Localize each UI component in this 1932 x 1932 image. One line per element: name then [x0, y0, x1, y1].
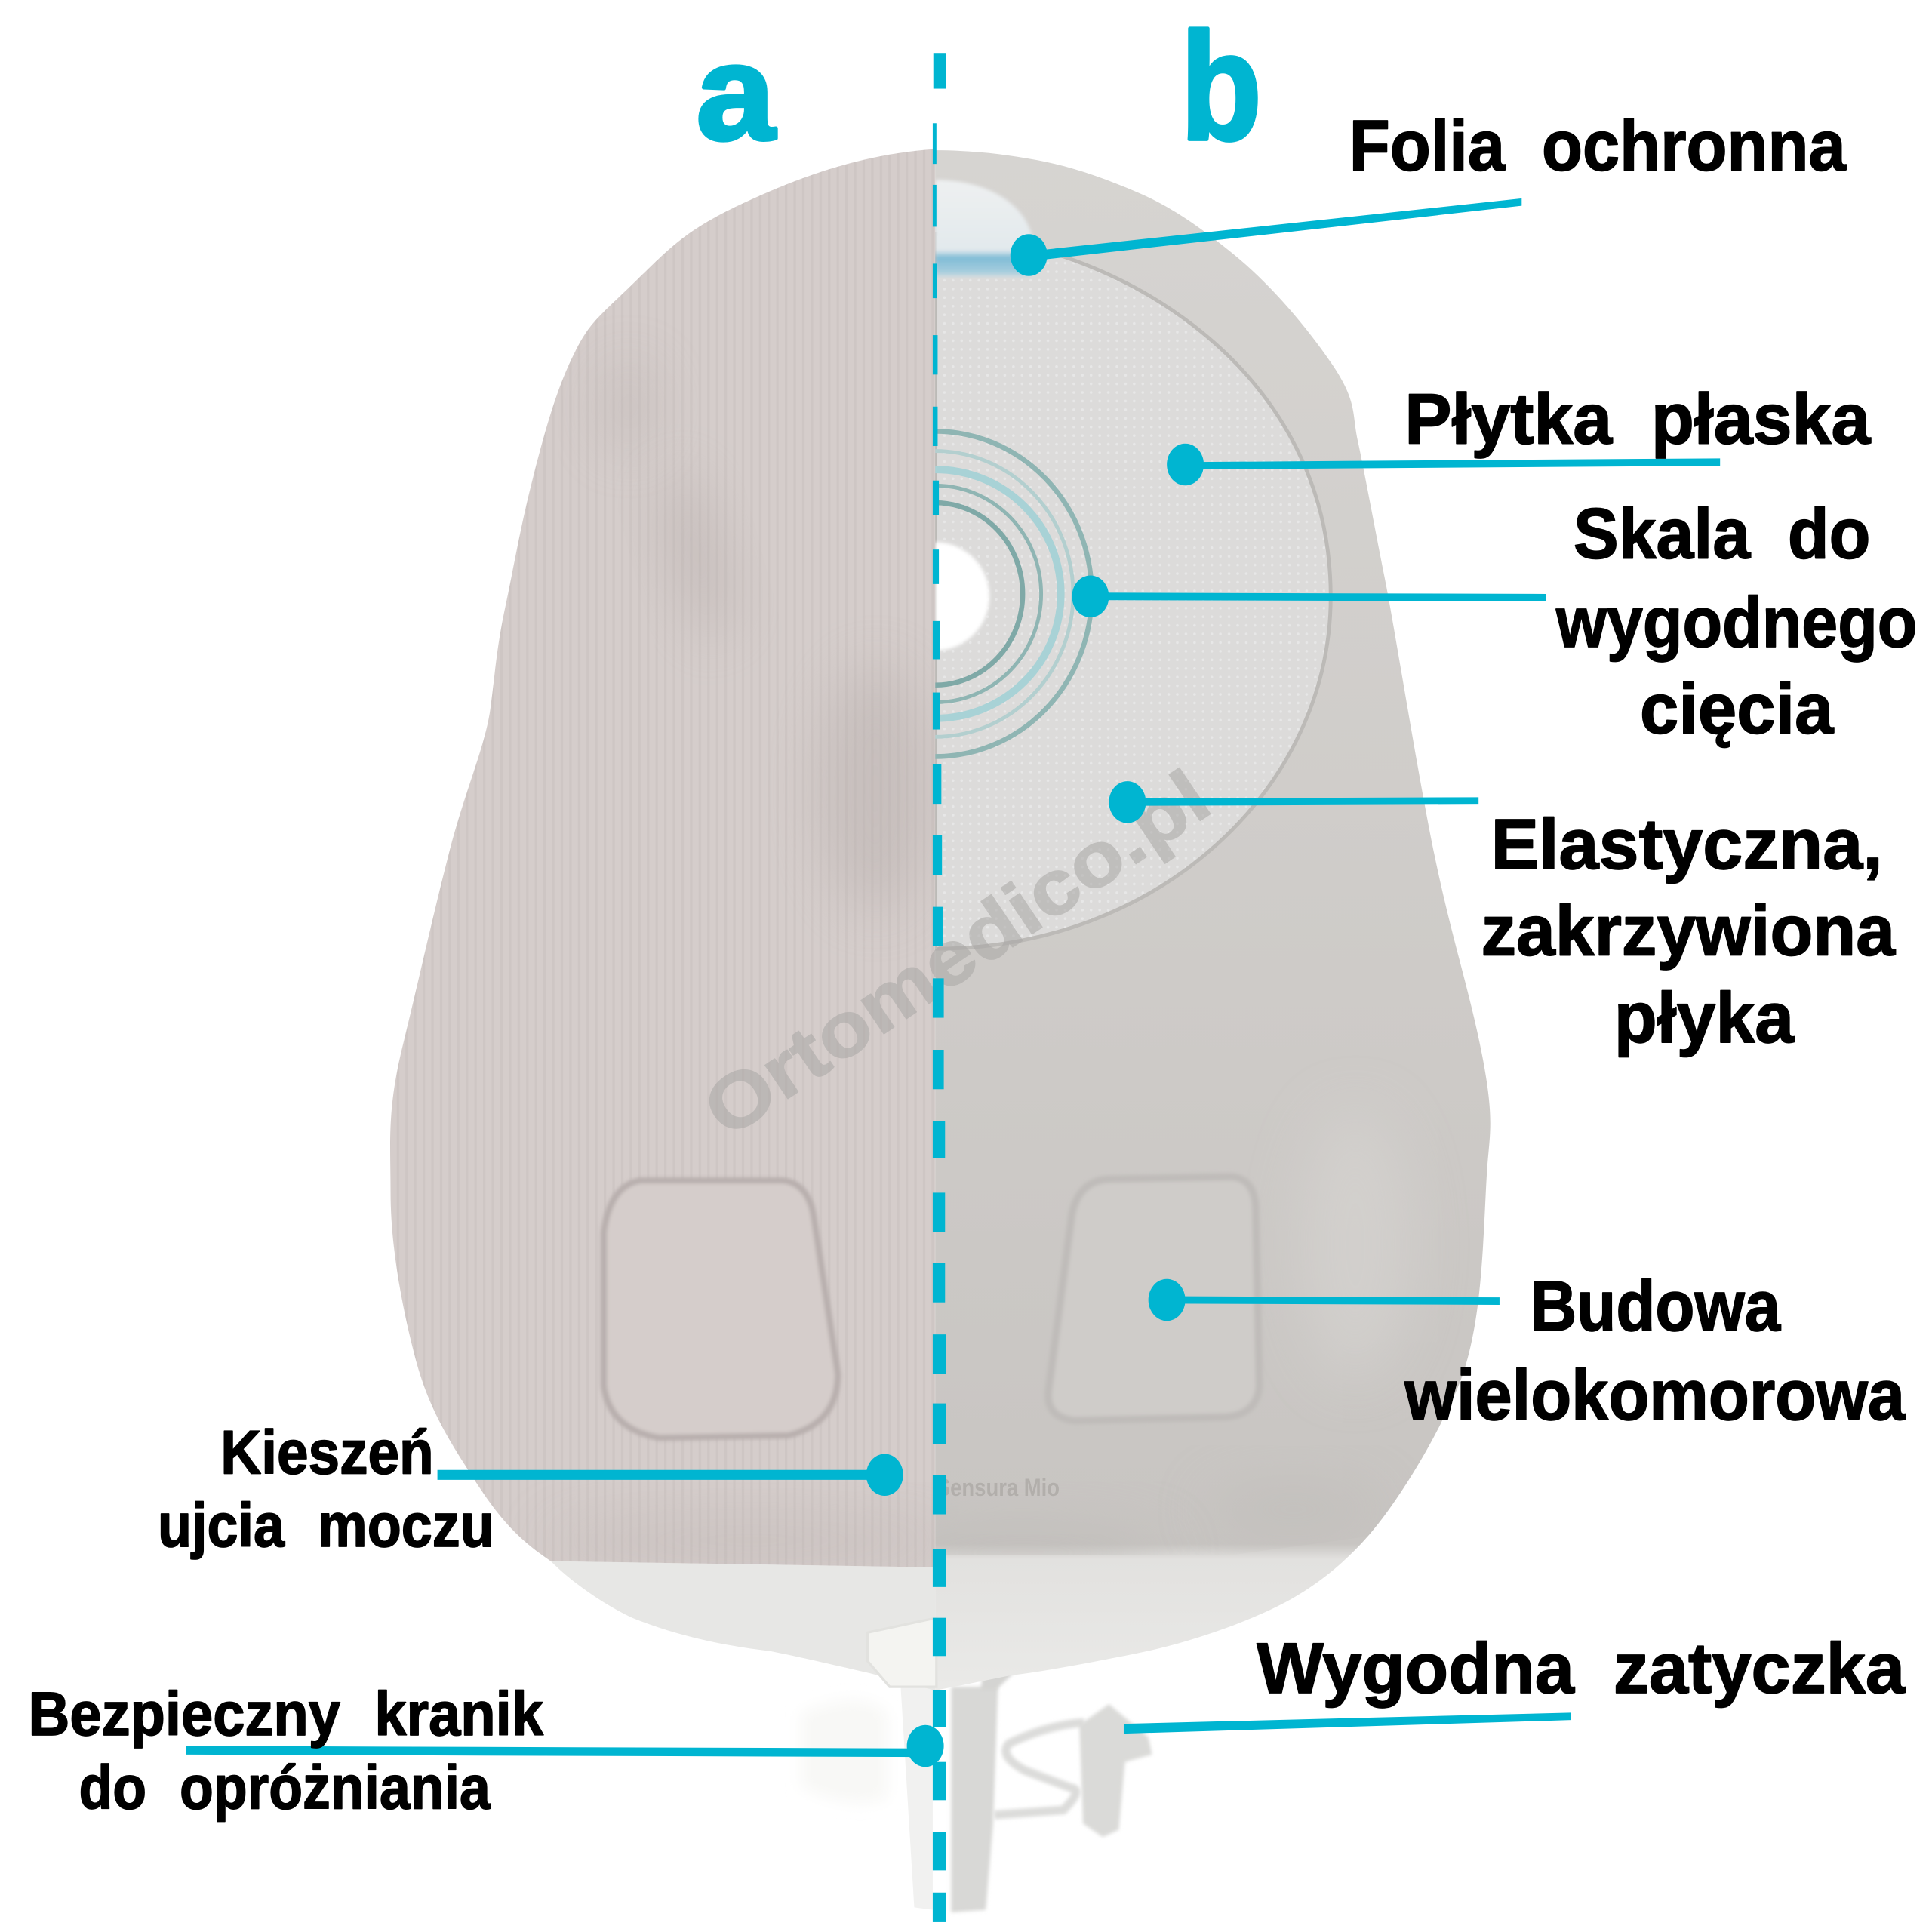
stoma hole [935, 542, 989, 651]
callout: Kieszeń ujcia moczu [158, 1419, 903, 1560]
bag a: lower clear strip [551, 1561, 935, 1690]
callout: Folia ochronna: Folia ochronna [1349, 106, 1847, 186]
callout: Kieszeń ujcia moczu: Kieszeń [220, 1419, 434, 1487]
heading: b: b [1180, 1, 1262, 171]
bag a: inner pocket outline [604, 1180, 838, 1438]
grey drain tube [951, 1687, 998, 1912]
closure plug [1079, 1704, 1152, 1837]
faint reflection [801, 1700, 888, 1803]
upper drain collar [981, 1609, 1032, 1690]
callout: Folia ochronna [1011, 106, 1847, 276]
tap and closure [801, 1609, 1152, 1912]
callout: Elastyczna, zakrzywiona płyka: zakrzywiona [1481, 891, 1896, 971]
right pocket [1048, 1177, 1260, 1420]
callout: Skala do wygodnego cięcia: Skala do [1574, 494, 1870, 574]
flat plate disc [935, 234, 1331, 949]
callout: Elastyczna, zakrzywiona płyka: płyka [1614, 978, 1795, 1058]
panel: bag back view b [875, 150, 1491, 1690]
faint logo print: Sensura Mio [937, 1473, 1060, 1501]
white tap collar [867, 1618, 937, 1687]
heading: a: a [696, 17, 777, 168]
drain stem [900, 1687, 933, 1910]
bag b: body [935, 150, 1491, 1690]
callout: Kieszeń ujcia moczu: ujcia moczu [158, 1491, 494, 1560]
callout: Płytka płaska [1167, 380, 1872, 485]
callout: Bezpieczny kranik do opróżniania: Bezpieczny kranik [29, 1680, 544, 1749]
callout: Budowa wielokomorowa [1149, 1266, 1906, 1435]
bag a: fabric body [390, 149, 935, 1567]
callout: Płytka płaska: Płytka płaska [1404, 380, 1872, 460]
panel: bag front view a [390, 149, 961, 1690]
watermark: Ortomedico.pl [688, 753, 1225, 1153]
callout: Budowa wielokomorowa: wielokomorowa [1404, 1355, 1906, 1435]
tether tube [995, 1722, 1084, 1815]
callout: Wygodna zatyczka: Wygodna zatyczka [1257, 1629, 1906, 1709]
callout: Elastyczna, zakrzywiona płyka: Elastyczna, [1491, 804, 1883, 884]
protective foil [935, 180, 1034, 277]
callout: Bezpieczny kranik do opróżniania: do opróżniania [78, 1754, 491, 1823]
callout: Wygodna zatyczka [1124, 1629, 1906, 1734]
divider dashed line [933, 53, 946, 1922]
callout: Elastyczna, zakrzywiona płyka [1109, 781, 1896, 1058]
callout: Skala do wygodnego cięcia: cięcia [1640, 669, 1835, 749]
callout: Budowa wielokomorowa: Budowa [1531, 1266, 1781, 1346]
callout: Bezpieczny kranik do opróżniania [29, 1680, 944, 1823]
callout: Skala do wygodnego cięcia [1072, 494, 1917, 749]
cutting scale rings [935, 431, 1092, 756]
